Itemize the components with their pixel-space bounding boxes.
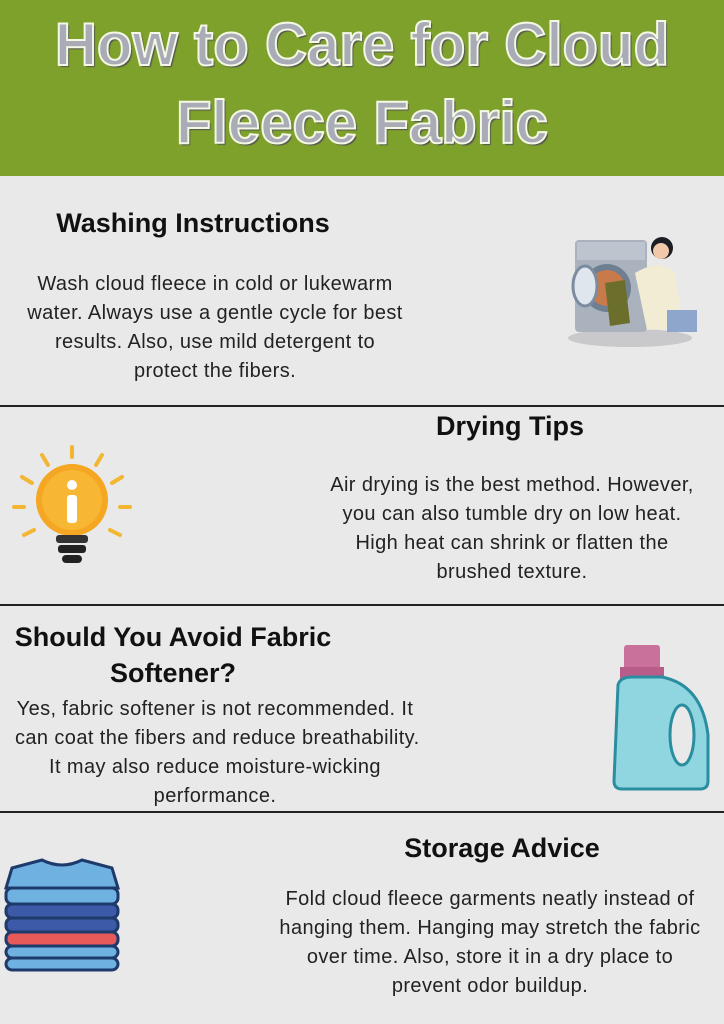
heading: softener: Should You Avoid Fabric [15,622,331,652]
text: softener: performance. [154,785,276,807]
heading: drying: Drying Tips [436,411,584,441]
text: storage: hanging them. Hanging may stretch the fabric [279,917,701,939]
text: softener: can coat the fibers and reduce breathability. [15,727,420,749]
heading: softener [15,622,331,688]
title [55,11,669,156]
text: softener [15,698,420,807]
text: washing: water. Always use a gentle cycle for best [27,302,403,324]
text: softener: Yes, fabric softener is not recommended. It [17,698,413,720]
title: Fleece Fabric [176,89,548,156]
text: drying: you can also tumble dry on low heat. [342,503,682,525]
text: drying: Air drying is the best method. However, [330,474,694,496]
text: washing: results. Also, use mild detergent to [55,331,375,353]
text: softener: It may also reduce moisture-wicking [49,756,381,778]
text: washing: protect the fibers. [134,360,296,382]
text: storage: Fold cloud fleece garments neatly instead of [286,888,694,910]
text: washing: Wash cloud fleece in cold or lukewarm [37,273,393,295]
text: storage [279,888,701,997]
heading: washing: Washing Instructions [56,208,330,238]
icon: detergent bottle [612,645,710,790]
heading: storage: Storage Advice [404,833,600,863]
text: drying: brushed texture. [437,561,587,583]
header banner [0,0,724,176]
icon: folded clothes stack [4,858,120,972]
title: How to Care for Cloud [55,11,669,78]
text: storage: over time. Also, store it in a dry place to [307,946,673,968]
text: storage: prevent odor buildup. [392,975,588,997]
text: washing [27,273,403,382]
heading: softener: Softener? [110,658,236,688]
text: drying [330,474,694,583]
icon: washing machine with woman [568,237,697,347]
text: drying: High heat can shrink or flatten the [355,532,669,554]
icon: light bulb [12,445,132,563]
